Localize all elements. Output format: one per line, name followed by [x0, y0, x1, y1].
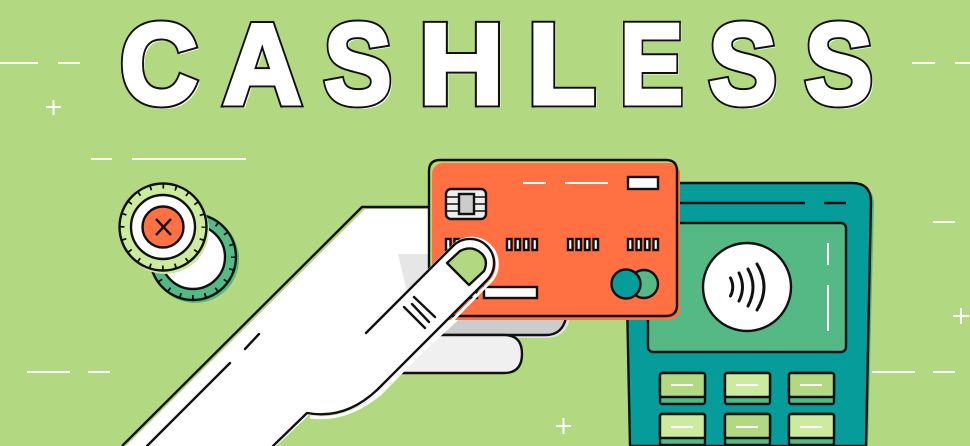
hand: pointing finger — [147, 238, 497, 446]
title: CASHLESS: S — [711, 2, 778, 130]
title: CASHLESS: S — [324, 0, 392, 128]
title: CASHLESS: H — [421, 2, 506, 130]
finger crease lines — [147, 297, 435, 446]
title: CASHLESS: H — [419, 0, 504, 128]
icon: contactless symbol — [703, 243, 791, 331]
card network logo — [612, 270, 658, 298]
title: CASHLESS: E — [620, 1, 683, 129]
hand: palm — [122, 207, 480, 446]
title: CASHLESS: S — [326, 2, 393, 130]
keypad — [660, 373, 834, 445]
title: CASHLESS: A — [223, 0, 302, 128]
terminal screen — [648, 223, 846, 352]
hand: back fingers — [360, 316, 569, 373]
title: CASHLESS: L — [528, 0, 596, 128]
title: CASHLESS: A — [223, 0, 302, 128]
card name fields — [445, 287, 537, 298]
icon: coins — [120, 184, 239, 303]
title: CASHLESS: L — [528, 0, 596, 128]
title: CASHLESS: C — [120, 1, 198, 128]
title: CASHLESS: E — [620, 1, 683, 129]
title: CASHLESS: L — [530, 2, 597, 130]
title: CASHLESS: E — [622, 3, 685, 131]
fingernail — [447, 248, 486, 285]
title: CASHLESS: S — [709, 0, 777, 128]
payment terminal — [625, 183, 874, 446]
title: CASHLESS: S — [324, 0, 392, 128]
title: CASHLESS: C — [122, 3, 200, 130]
title: CASHLESS: S — [807, 2, 874, 130]
title: CASHLESS: C — [120, 1, 198, 128]
card chip — [446, 189, 486, 219]
title: CASHLESS: A — [225, 2, 303, 130]
title: CASHLESS: S — [805, 0, 873, 128]
title: CASHLESS — [120, 0, 874, 131]
title: CASHLESS: S — [709, 0, 777, 128]
card number — [446, 239, 658, 250]
title: CASHLESS: H — [419, 0, 504, 128]
front coin — [120, 184, 209, 274]
title: CASHLESS: S — [805, 0, 873, 128]
back coin — [150, 214, 239, 303]
credit card — [429, 160, 680, 320]
